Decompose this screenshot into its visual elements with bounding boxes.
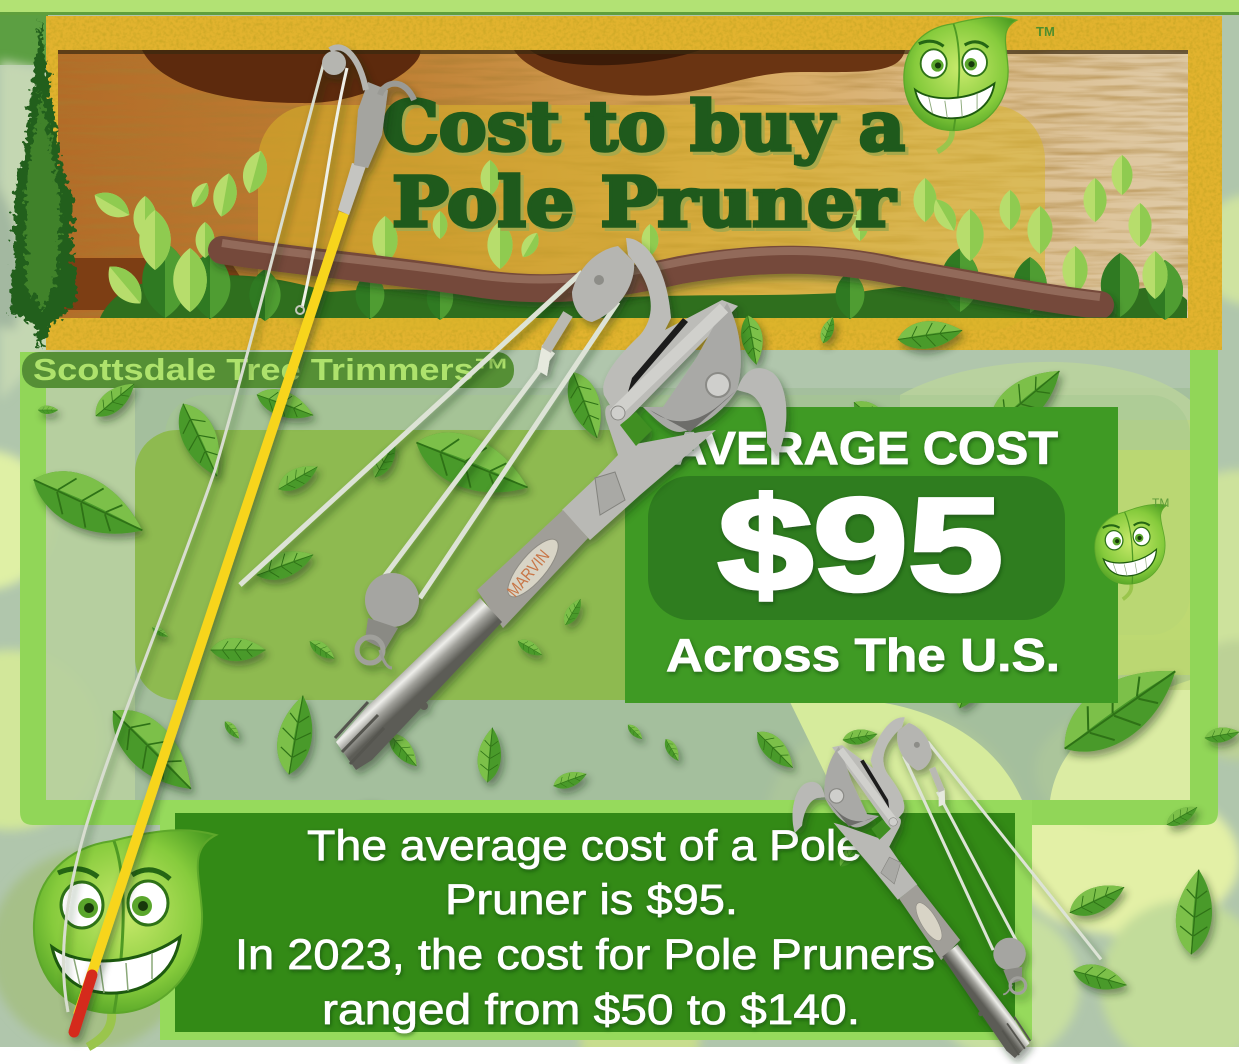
icon: cypress tree xyxy=(10,20,78,350)
branch xyxy=(222,243,1100,305)
panel: average cost xyxy=(625,407,1118,703)
title: Cost to buy a xyxy=(382,87,905,167)
mascot: right: TM xyxy=(1152,496,1169,510)
location caption: Across The U.S. xyxy=(666,629,1060,681)
pole saw xyxy=(63,47,414,1032)
title: Pole Pruner xyxy=(392,163,896,243)
summary copy: Pruner is $95. xyxy=(445,876,738,924)
main pole pruner head xyxy=(240,238,786,770)
average price value: $95 xyxy=(718,471,1003,618)
mascot: top: TM xyxy=(1036,24,1055,39)
title: Pole Pruner xyxy=(395,166,899,246)
panel: header wood frame xyxy=(46,16,1222,350)
summary copy: ranged from $50 to $140. xyxy=(322,986,860,1034)
mascot: right xyxy=(1091,496,1176,602)
secondary pole pruner xyxy=(760,702,1134,1064)
average cost heading: AVERAGE COST xyxy=(672,422,1058,474)
mint leaves xyxy=(23,313,1239,996)
brand label: Scottsdale Tree Trimmers™ xyxy=(33,352,510,387)
panel: average cost frame xyxy=(20,350,1218,825)
brand mark: MARVIN xyxy=(504,546,553,601)
title: Cost to buy a xyxy=(385,90,908,170)
mascot: top xyxy=(904,17,1055,152)
summary copy: The average cost of a Pole xyxy=(307,822,862,870)
summary copy: In 2023, the cost for Pole Pruners xyxy=(235,931,935,979)
header foliage xyxy=(89,148,1187,321)
title xyxy=(382,87,908,246)
panel: summary text xyxy=(160,800,1032,1040)
mascot: bottom left xyxy=(34,830,216,1047)
summary copy xyxy=(235,822,935,1034)
